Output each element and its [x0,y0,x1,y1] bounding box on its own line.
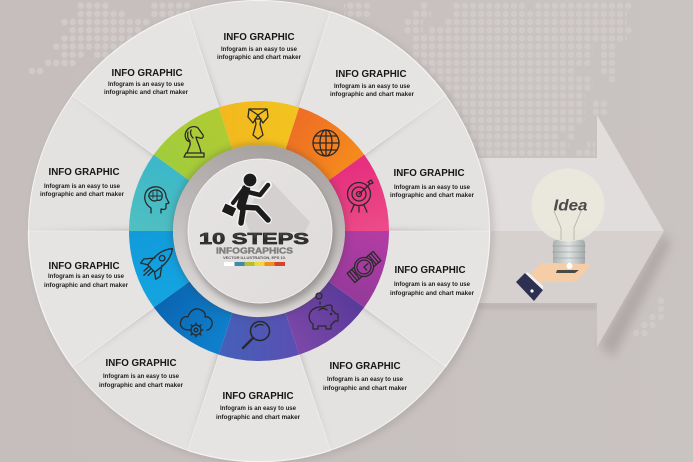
wedge shadows [56,36,462,424]
label: upper right [330,69,415,98]
label: right lower: INFO GRAPHIC [394,265,466,276]
central title [199,231,309,266]
long shadow [245,180,310,232]
10 steps heading: 10 STEPS [199,231,309,248]
label: left lower: infographic and chart maker [44,283,129,289]
label: left upper: Infogram is an easy to use [44,184,121,190]
label: upper right: infographic and chart maker [330,92,415,98]
icon: target [348,180,373,212]
infographics subtitle: INFOGRAPHICS [216,246,293,256]
label: left lower: Infogram is an easy to use [48,274,125,280]
icon: cloud with gear [180,309,212,337]
label: bottom: INFO GRAPHIC [222,391,294,402]
icon: piggy bank [309,293,338,329]
label: top: Infogram is an easy to use [221,47,298,53]
label: right upper: INFO GRAPHIC [394,168,464,179]
icon: wristwatch [345,249,383,285]
thumb highlight [566,263,572,269]
label: top [217,32,302,61]
tiny vector caption: VECTOR ILLUSTRATION, EPS 10. [223,256,286,260]
label: upper left: infographic and chart maker [104,90,189,96]
idea label: Idea [554,198,588,214]
light bulb [532,168,604,265]
label: right lower: Infogram is an easy to use [394,282,471,288]
icon: chess knight [184,127,204,157]
label: left lower [44,261,129,289]
label: lower right [323,361,408,392]
coloured ring [129,101,389,361]
label: left upper [40,167,125,198]
icon: rocket [136,240,181,284]
label: upper right: Infogram is an easy to use [334,84,411,90]
label: right lower [390,265,475,297]
label: right lower: infographic and chart maker [390,291,475,297]
colour bar [224,262,285,266]
hand [530,263,590,285]
label: upper left [104,68,189,96]
label: upper left: INFO GRAPHIC [112,68,182,79]
label: bottom: Infogram is an easy to use [220,406,297,412]
label: bottom [216,391,301,421]
label: bottom: infographic and chart maker [216,415,301,421]
label: lower left: Infogram is an easy to use [103,374,180,380]
label: lower right: INFO GRAPHIC [330,361,400,372]
wheel shadow on arrow [30,1,494,462]
label: left upper: infographic and chart maker [40,192,125,198]
icon: necktie [248,109,268,139]
label: upper left: Infogram is an easy to use [108,82,185,88]
label: left lower: INFO GRAPHIC [48,261,120,272]
icon: idea light bulb in hand [516,168,604,301]
label: right upper: Infogram is an easy to use [394,185,471,191]
raised wedges [28,11,490,462]
sleeve cuff [516,272,543,301]
icon: running businessman [221,173,268,223]
label: lower left: infographic and chart maker [99,383,184,389]
label: left upper: INFO GRAPHIC [48,167,120,178]
icon: magnifying glass [243,322,270,348]
label: lower left [99,358,184,389]
label: right upper: infographic and chart maker [390,193,475,199]
label: lower right: Infogram is an easy to use [327,377,404,383]
wheel panel [28,0,494,462]
label: upper right: INFO GRAPHIC [336,69,406,80]
label: lower right: infographic and chart maker [323,386,408,392]
dotted world map [27,2,664,336]
label: lower left: INFO GRAPHIC [106,358,176,369]
palm shadow [556,270,579,273]
icon: head with brain [145,187,169,213]
centre hub [171,143,347,319]
label: right upper [390,168,475,199]
icon: globe [313,130,339,156]
label: top: infographic and chart maker [217,55,302,61]
arrow [440,115,670,358]
label: top: INFO GRAPHIC [224,32,294,43]
